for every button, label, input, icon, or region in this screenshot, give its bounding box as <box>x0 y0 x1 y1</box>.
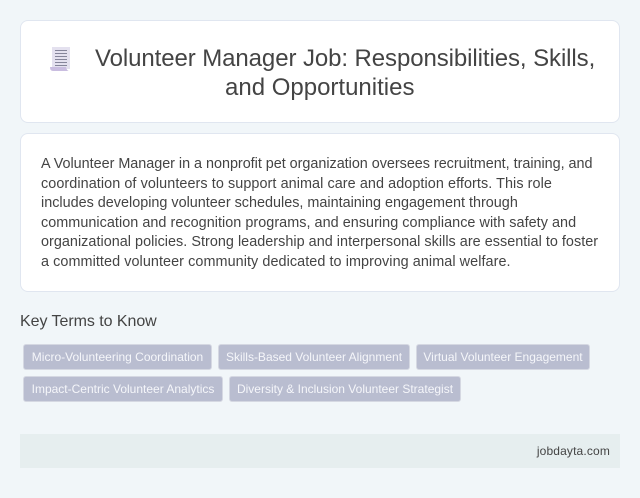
description text: a committed volunteer community dedicated to improving animal welfare. <box>41 254 511 270</box>
tag <box>229 376 461 402</box>
title: Volunteer Manager Job: Responsibilities, Skills, <box>95 45 595 72</box>
tag: Impact-Centric Volunteer Analytics <box>32 382 214 396</box>
description text <box>41 156 598 270</box>
title second line: and Opportunities <box>225 74 414 101</box>
tag: Virtual Volunteer Engagement <box>423 350 583 364</box>
description text: organizational policies. Strong leadership and interpersonal skills are essential to foster <box>41 234 598 250</box>
description text: coordination of volunteers to support animal care and adoption efforts. This role <box>41 176 552 192</box>
tag: Micro-Volunteering Coordination <box>32 350 203 364</box>
description text: communication and recognition programs, and ensuring compliance with safety and <box>41 214 576 230</box>
tag <box>416 344 590 370</box>
tag <box>23 344 212 370</box>
footer source text: jobdayta.com <box>537 444 610 458</box>
tag: Skills-Based Volunteer Alignment <box>226 350 402 364</box>
panel: title card <box>20 20 620 123</box>
tag: Diversity & Inclusion Volunteer Strategist <box>237 382 453 396</box>
panel: description card <box>20 133 620 292</box>
description text: includes developing volunteer schedules, maintaining engagement through <box>41 195 518 211</box>
tag <box>218 344 410 370</box>
description text: A Volunteer Manager in a nonprofit pet organization oversees recruitment, training, and <box>41 156 592 172</box>
tag <box>23 376 223 402</box>
heading: key terms: Key Terms to Know <box>20 313 157 330</box>
tag list <box>23 344 590 402</box>
footer bar <box>20 434 620 468</box>
icon: document scroll <box>50 47 70 71</box>
